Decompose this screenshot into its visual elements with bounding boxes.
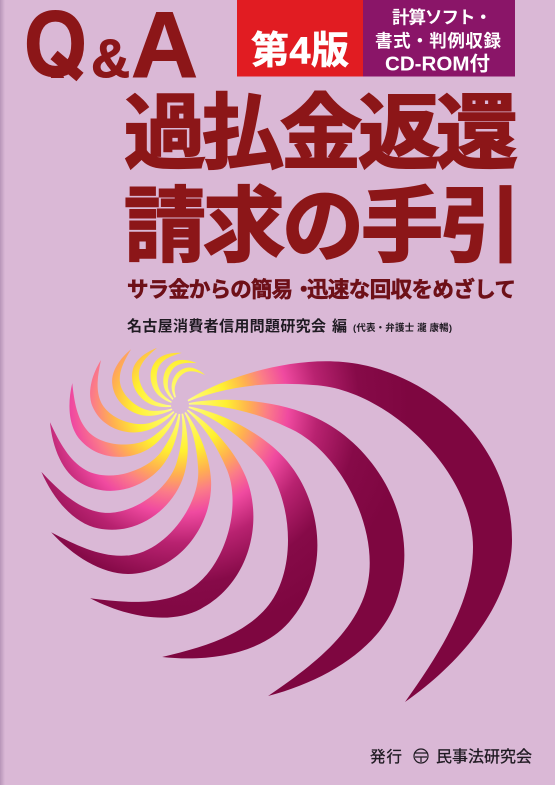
icon: publisher mark xyxy=(414,749,428,763)
arm 1 xyxy=(180,361,512,702)
arm 10 xyxy=(110,346,181,418)
publisher xyxy=(370,748,532,766)
arm 9 xyxy=(77,338,184,447)
subtitle: サラ金からの簡易 xyxy=(127,278,293,302)
badge: CD-ROM: CD-ROM付 xyxy=(385,52,490,76)
author: 名古屋消費者信用問題研究会 xyxy=(127,317,326,335)
title line 1: 過払金返還 xyxy=(124,88,518,180)
arm 2 xyxy=(96,372,446,726)
subtitle: ・ xyxy=(293,278,315,302)
arm 8 xyxy=(49,339,189,479)
badge: CD-ROM: 書式・判例収録 xyxy=(375,31,502,51)
badge: CD-ROM: 計算ソフト・ xyxy=(392,8,492,28)
swirl centre xyxy=(171,396,189,414)
swirl graphic xyxy=(30,338,512,726)
author: 編 xyxy=(332,318,347,335)
badge: 4th edition: 第4版 xyxy=(251,30,349,72)
arm 3 xyxy=(47,383,369,705)
arm 5 xyxy=(37,402,222,584)
author xyxy=(127,317,452,335)
arm 12 xyxy=(140,343,206,410)
arm 7 xyxy=(31,353,193,514)
subtitle: 迅速な回収をめざして xyxy=(307,277,516,302)
author: (代表・弁護士 瀧 康暢) xyxy=(353,322,452,334)
badge: CD-ROM xyxy=(363,0,515,76)
arm 11 xyxy=(125,343,193,412)
heading: Q&A: & xyxy=(91,29,130,89)
arm 6 xyxy=(33,381,198,543)
arm 4 xyxy=(30,393,291,652)
arm 14 xyxy=(168,364,210,406)
arm 13 xyxy=(155,352,211,408)
publisher: 民事法研究会 xyxy=(436,748,532,766)
title line 2: 請求の手引 xyxy=(124,182,522,272)
badge: 4th edition xyxy=(237,0,363,76)
publisher: 発行 xyxy=(370,748,402,766)
subtitle xyxy=(127,277,516,302)
heading: Q&A xyxy=(26,10,196,82)
